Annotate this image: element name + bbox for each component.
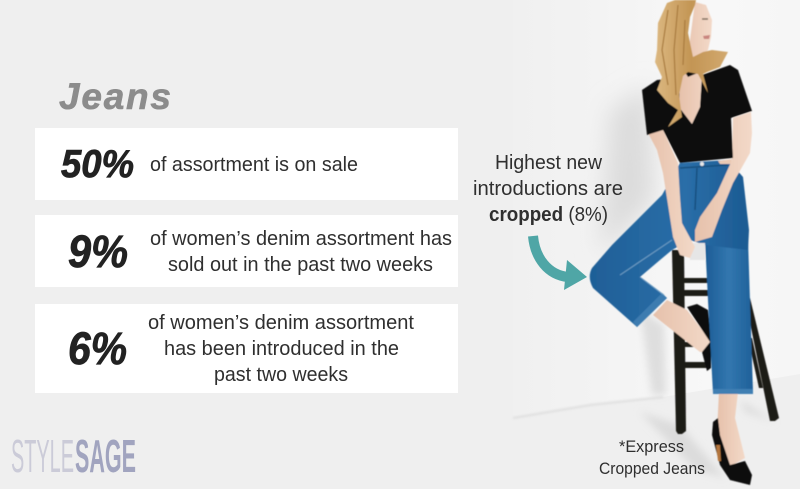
text: SAGE bbox=[75, 430, 136, 482]
text: sold out: of women’s denim assortment has bbox=[150, 228, 452, 250]
text: sold out: sold out in the past two weeks bbox=[168, 254, 433, 276]
stat: 50%: 50% bbox=[61, 143, 134, 186]
stat: 6%: 6% bbox=[68, 323, 127, 374]
text: introduced: of women’s denim assortment bbox=[148, 312, 414, 334]
top, neck and hair bbox=[642, 0, 752, 163]
callout: highest new introductions: Highest new bbox=[495, 152, 603, 174]
callout: highest new introductions: introductions are bbox=[473, 178, 623, 200]
heading: Jeans: Jeans bbox=[59, 76, 171, 117]
arrow: teal curved bbox=[533, 236, 587, 290]
front leg and heel bbox=[712, 392, 752, 485]
figure bbox=[590, 0, 779, 485]
text: introduced: has been introduced in the bbox=[164, 338, 399, 360]
panel: 50% on sale bbox=[35, 128, 458, 200]
caption: Express Cropped Jeans: Cropped Jeans bbox=[599, 459, 705, 478]
callout: highest new introductions: cropped (8%) bbox=[489, 204, 608, 226]
logo: StyleSage: STYLE bbox=[11, 430, 74, 482]
panel: 6% introduced bbox=[35, 304, 458, 393]
jeans bbox=[590, 159, 753, 394]
callout: highest new introductions bbox=[473, 152, 623, 226]
text: introduced bbox=[148, 312, 414, 386]
back leg and shoe bbox=[653, 300, 711, 371]
caption: Express Cropped Jeans bbox=[599, 437, 705, 478]
stat: 9%: 9% bbox=[68, 226, 128, 277]
text: assortment on sale: of assortment is on sale bbox=[150, 154, 358, 176]
stool bbox=[672, 250, 779, 434]
arms bbox=[648, 112, 752, 258]
panel: 9% sold out bbox=[35, 215, 458, 287]
text: introduced: past two weeks bbox=[214, 364, 348, 386]
caption: Express Cropped Jeans: *Express bbox=[619, 437, 684, 456]
photo: model in cropped jeans on a stool bbox=[513, 0, 800, 489]
text: sold out bbox=[150, 228, 452, 276]
